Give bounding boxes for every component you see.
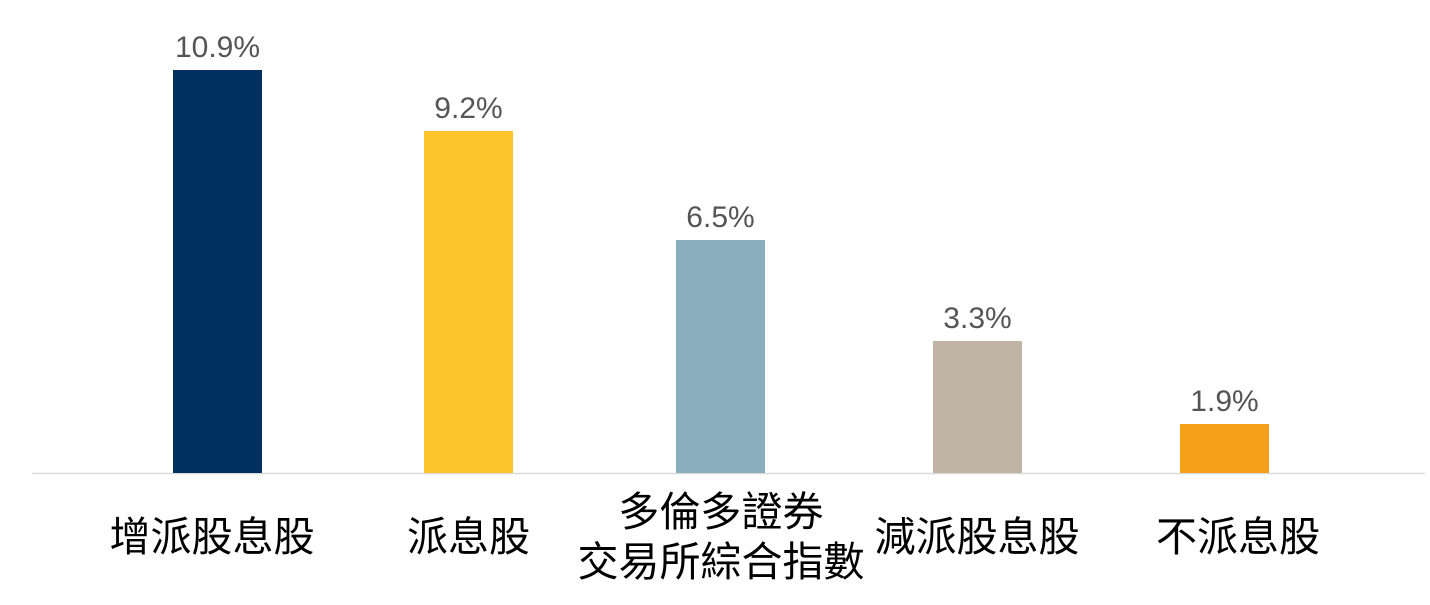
bar: 派息股: 9.2% — [434, 92, 503, 125]
bar: 多倫多證券交易所綜合指數: 6.5% — [686, 201, 755, 234]
bar: 不派息股: 1.9% — [1190, 385, 1259, 418]
bar: 多倫多證券交易所綜合指數 — [578, 201, 864, 585]
bar: 派息股: 派息股 — [407, 514, 530, 560]
bar: 增派股息股: 10.9% — [175, 31, 260, 64]
bar: 增派股息股: 增派股息股 — [110, 514, 314, 560]
bar: 減派股息股 — [874, 302, 1080, 560]
bar: 減派股息股: 減派股息股 — [874, 514, 1080, 560]
bar: 減派股息股: 3.3% — [943, 302, 1012, 335]
bar: 派息股 — [407, 92, 530, 560]
bar: 多倫多證券交易所綜合指數: 交易所綜合指數 — [578, 539, 864, 585]
bar: 增派股息股 — [110, 31, 314, 560]
bar: 不派息股 — [1156, 385, 1320, 560]
bar: 多倫多證券交易所綜合指數: 多倫多證券 — [618, 489, 824, 535]
bar: 不派息股: 不派息股 — [1156, 514, 1320, 560]
